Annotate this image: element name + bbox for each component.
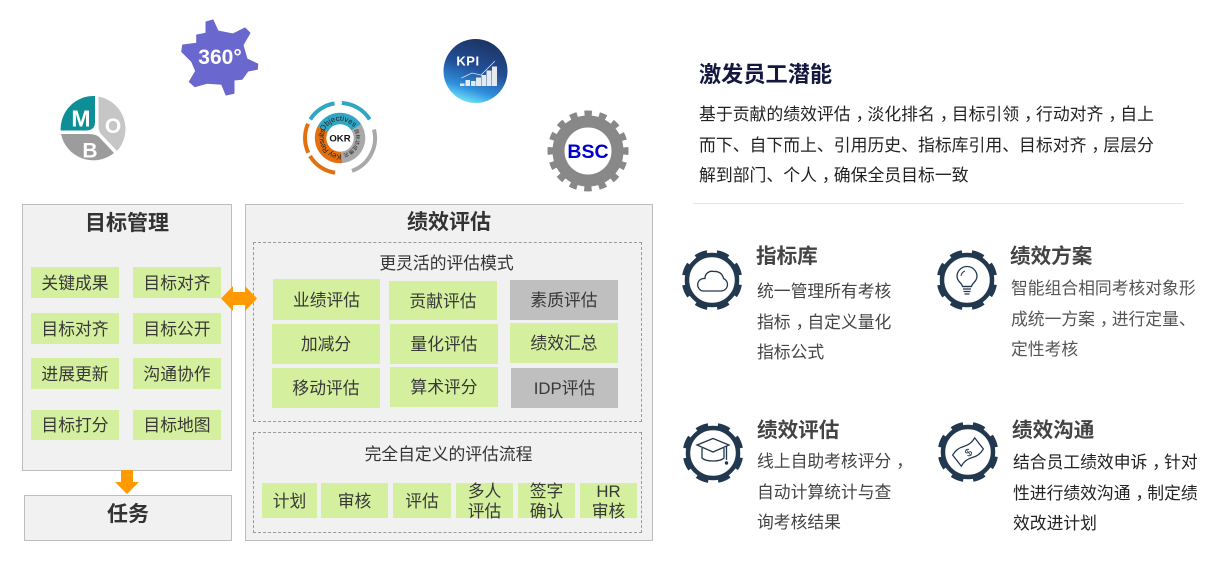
description: 线上自助考核评分 ， — [757, 452, 913, 471]
mode: 素质评估 — [530, 291, 598, 310]
panel: 绩效评估 — [245, 204, 653, 541]
tag: 目标对齐 — [143, 274, 211, 292]
step — [262, 483, 317, 518]
icon: OKR ring: 目标达成情况 — [344, 129, 360, 158]
icon: MBO pie: B — [82, 140, 98, 162]
feature: 绩效方案 — [937, 245, 1196, 359]
mode — [273, 279, 380, 320]
tag — [133, 358, 221, 389]
step — [321, 483, 388, 518]
mode — [510, 323, 618, 363]
icon: banknote gear — [938, 422, 998, 482]
icon: BSC gear: BSC — [567, 141, 609, 163]
description — [1013, 453, 1198, 533]
mode: 量化评估 — [410, 335, 478, 354]
step: 审核 — [592, 502, 625, 520]
tag: 目标对齐 — [41, 320, 109, 338]
step: 审核 — [338, 492, 371, 510]
tag — [31, 267, 119, 298]
description — [1011, 279, 1196, 359]
text block: intro: 基于贡献的绩效评估 ，淡化排名 ，目标引领 ，行动对齐 ，自上 — [699, 105, 1154, 124]
icon: banknote gear: $ — [963, 447, 975, 460]
tag — [133, 267, 221, 298]
description: 统一管理所有考核 — [757, 282, 891, 301]
description: 结合员工绩效申诉 ，针对 — [1013, 453, 1198, 472]
mode: 业绩评估 — [293, 290, 360, 310]
tag: 目标公开 — [143, 320, 211, 338]
icon: MBO pie: O — [105, 115, 121, 138]
description: 指标公式 — [757, 343, 824, 362]
mode — [510, 280, 618, 320]
mode: 贡献评估 — [409, 292, 477, 310]
description: 性进行绩效沟通 ，制定绩 — [1013, 484, 1198, 502]
description — [757, 282, 891, 362]
description: 智能组合相同考核对象形 — [1011, 279, 1196, 298]
description: 效改进计划 — [1013, 514, 1097, 533]
title: 绩效方案 — [1010, 245, 1092, 268]
step — [393, 483, 451, 518]
step: 签字 — [530, 482, 563, 501]
icon: OKR ring: Key Results — [318, 130, 341, 160]
heading: 绩效评估: 绩效评估 — [407, 211, 491, 234]
icon: cloud gear — [682, 250, 742, 310]
mode: 移动评估 — [292, 379, 360, 398]
step: 计划 — [273, 492, 306, 510]
tag: 进展更新 — [41, 364, 109, 384]
mode — [272, 368, 380, 408]
icon: 360 degree gear: 360° — [198, 46, 242, 69]
icon: KPI badge: KPI — [456, 54, 480, 68]
mode — [390, 367, 498, 407]
icon: bulb gear — [937, 250, 997, 310]
mode — [511, 368, 618, 408]
subheading: 更灵活的评估模式 — [379, 254, 514, 273]
icon: KPI badge — [444, 39, 508, 103]
tag — [133, 410, 221, 440]
mode: IDP评估 — [534, 379, 595, 398]
tag: 目标打分 — [41, 416, 109, 435]
description: 指标 ，自定义量化 — [757, 312, 891, 332]
panel: 目标管理 — [22, 204, 232, 471]
description: 成统一方案 ，进行定量、 — [1011, 310, 1196, 328]
text block: intro: 解到部门、个人 ，确保全员目标一致 — [699, 166, 969, 185]
tag — [31, 410, 119, 440]
step — [456, 483, 513, 518]
step: 评估 — [468, 502, 501, 520]
title: 指标库 — [756, 245, 818, 268]
icon: graduation cap gear — [683, 423, 743, 483]
feature: 绩效评估 — [683, 419, 913, 532]
text block: intro: 而下、自下而上、引用历史、指标库引用、目标对齐 ，层层分 — [699, 136, 1154, 154]
step: 评估 — [405, 492, 439, 510]
panel: 完全自定义的评估流程 — [253, 432, 642, 533]
step — [518, 483, 575, 518]
panel: 更灵活的评估模式 — [253, 242, 642, 422]
heading: 目标管理: 目标管理 — [85, 212, 169, 235]
title: 绩效评估 — [757, 419, 839, 442]
icon: OKR ring — [303, 101, 378, 175]
title: 绩效沟通 — [1012, 419, 1094, 442]
heading: 激发员工潜能: 激发员工潜能 — [699, 62, 832, 87]
step: 多人 — [468, 482, 501, 501]
mode: 绩效汇总 — [530, 334, 598, 353]
step — [580, 483, 637, 518]
top logo icons — [60, 20, 628, 192]
tag: 目标地图 — [143, 416, 211, 435]
mode — [390, 324, 498, 364]
tag — [133, 313, 221, 344]
step: HR — [596, 482, 621, 501]
panel: 任务 — [24, 495, 232, 541]
feature: 绩效沟通 — [938, 419, 1198, 533]
icon: MBO pie — [61, 96, 125, 162]
mode — [389, 281, 497, 320]
description — [757, 452, 913, 532]
heading: 任务: 任务 — [107, 503, 149, 526]
subheading: 完全自定义的评估流程 — [365, 445, 532, 464]
mode: 算术评分 — [410, 378, 478, 397]
tag — [31, 358, 119, 389]
icon: BSC gear — [548, 111, 628, 191]
description: 询考核结果 — [757, 513, 841, 532]
step: 确认 — [530, 502, 563, 520]
text block: intro — [699, 105, 1154, 185]
mode: 加减分 — [301, 335, 351, 354]
mode — [272, 324, 380, 364]
tag — [31, 313, 119, 344]
description: 自动计算统计与查 — [757, 482, 891, 502]
feature: 指标库 — [682, 245, 891, 362]
tag: 关键成果 — [41, 274, 109, 292]
icon: OKR ring: Objectives — [320, 116, 356, 130]
icon: 360 degree gear — [182, 20, 258, 95]
icon: MBO pie: M — [71, 106, 91, 132]
icon: OKR ring: OKR — [329, 134, 351, 144]
tag: 沟通协作 — [143, 364, 211, 384]
description: 定性考核 — [1011, 340, 1078, 359]
